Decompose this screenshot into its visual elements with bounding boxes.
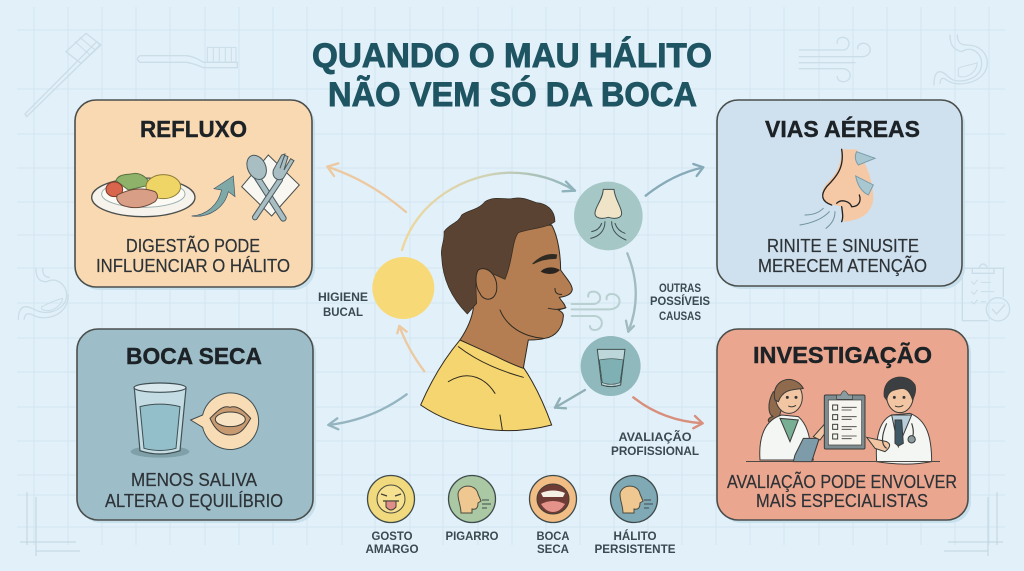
label: outras possiveis causas: CAUSAS [659, 311, 701, 323]
text: gosto amargo: GOSTO [372, 531, 413, 543]
arrow: to refluxo [327, 163, 406, 212]
icon: crossed spoon and fork on napkin [242, 152, 299, 218]
text: boca seca description: MENOS SALIVA [131, 470, 257, 490]
icon: plate with food [92, 173, 195, 217]
icon: clipboard checklist [824, 391, 865, 449]
text: halito persistente [594, 530, 676, 556]
heading: vias aereas: VIAS AÉREAS [765, 115, 920, 142]
icon: water glass circle [581, 336, 641, 396]
label: higiene bucal: HIGIENE [318, 292, 368, 304]
text: pigarro: PIGARRO [446, 531, 499, 543]
arrow: glass to investigacao [633, 397, 703, 428]
label: higiene bucal [318, 292, 368, 319]
icon: nose with sinuses [800, 149, 875, 228]
icon: nose circle [574, 182, 643, 250]
symptom row [366, 476, 676, 556]
arrow: nose to vias aereas [646, 164, 703, 196]
text: boca seca description [105, 470, 283, 511]
label: avaliacao profissional [611, 431, 699, 458]
text: halito persistente: HÁLITO [614, 530, 657, 543]
text: boca seca symptom: BOCA [536, 531, 570, 543]
text: boca seca description: ALTERA O EQUILÍBRIO [105, 491, 283, 511]
panel: vias aereas [717, 100, 965, 289]
panel: investigacao [717, 329, 971, 523]
icon: breath swirl [572, 292, 620, 330]
arrow: glass to head [555, 390, 585, 408]
text: refluxo description: DIGESTÃO PODE [126, 235, 260, 256]
text: investigacao description: MAIS ESPECIALISTAS [756, 491, 928, 511]
arrow: plate to cutlery [192, 176, 235, 216]
label: avaliacao profissional: PROFISSIONAL [611, 446, 699, 458]
panel: refluxo [75, 100, 315, 290]
text: investigacao description [727, 471, 957, 511]
text: refluxo description [96, 235, 290, 276]
icon: pigarro [448, 476, 496, 522]
icon: background stomach top right [934, 35, 987, 85]
text: gosto amargo: AMARGO [366, 544, 419, 556]
heading: boca seca: BOCA SECA [126, 343, 262, 369]
icon: background toothbrush horizontal [137, 47, 237, 68]
icon: boca seca symptom [530, 476, 576, 522]
label: avaliacao profissional: AVALIAÇÃO [618, 431, 692, 444]
text: boca seca symptom [536, 531, 570, 556]
diagram: central flow [327, 163, 703, 431]
icon: halito persistente [610, 476, 658, 522]
heading: refluxo: REFLUXO [140, 116, 247, 142]
title: NÃO VEM SÓ DA BOCA [328, 76, 697, 114]
icon: background stomach left [18, 268, 68, 319]
label: outras possiveis causas [650, 283, 710, 323]
label: outras possiveis causas: POSSÍVEIS [650, 295, 710, 308]
title [312, 37, 712, 114]
text: boca seca symptom: SECA [537, 544, 569, 556]
text: refluxo description: INFLUENCIAR O HÁLITO [96, 256, 290, 276]
icon: background toothbrush diagonal [25, 33, 101, 117]
panel: boca seca [77, 329, 316, 523]
text: vias aereas description: MERECEM ATENÇÃO [758, 255, 927, 276]
arrow: shoulder to hygiene [397, 326, 424, 371]
arrow: to boca seca [328, 394, 407, 429]
icon: speech bubble with lips [191, 393, 259, 449]
label: higiene bucal: BUCAL [323, 307, 363, 319]
icon: female doctor [760, 379, 827, 462]
arrow: hygiene to nose [402, 173, 575, 250]
illustration: person in profile [421, 198, 572, 431]
icon: background clipboard [962, 264, 1010, 321]
text: halito persistente: PERSISTENTE [594, 544, 676, 556]
icon: hygiene circle [372, 257, 434, 319]
arrow: nose to glass [626, 253, 636, 332]
icon: background wind [799, 37, 870, 82]
label: outras possiveis causas: OUTRAS [659, 283, 701, 295]
icon: gosto amargo [368, 476, 414, 522]
title: QUANDO O MAU HÁLITO [312, 37, 712, 75]
icon: glass of water [131, 383, 189, 458]
text: vias aereas description [758, 236, 927, 276]
heading: investigacao: INVESTIGAÇÃO [753, 341, 932, 368]
icon: male doctor [867, 377, 932, 464]
text: vias aereas description: RINITE E SINUSITE [767, 236, 919, 256]
text: investigacao description: AVALIAÇÃO PODE ENVOLVER [727, 471, 957, 492]
text: gosto amargo [366, 531, 419, 556]
